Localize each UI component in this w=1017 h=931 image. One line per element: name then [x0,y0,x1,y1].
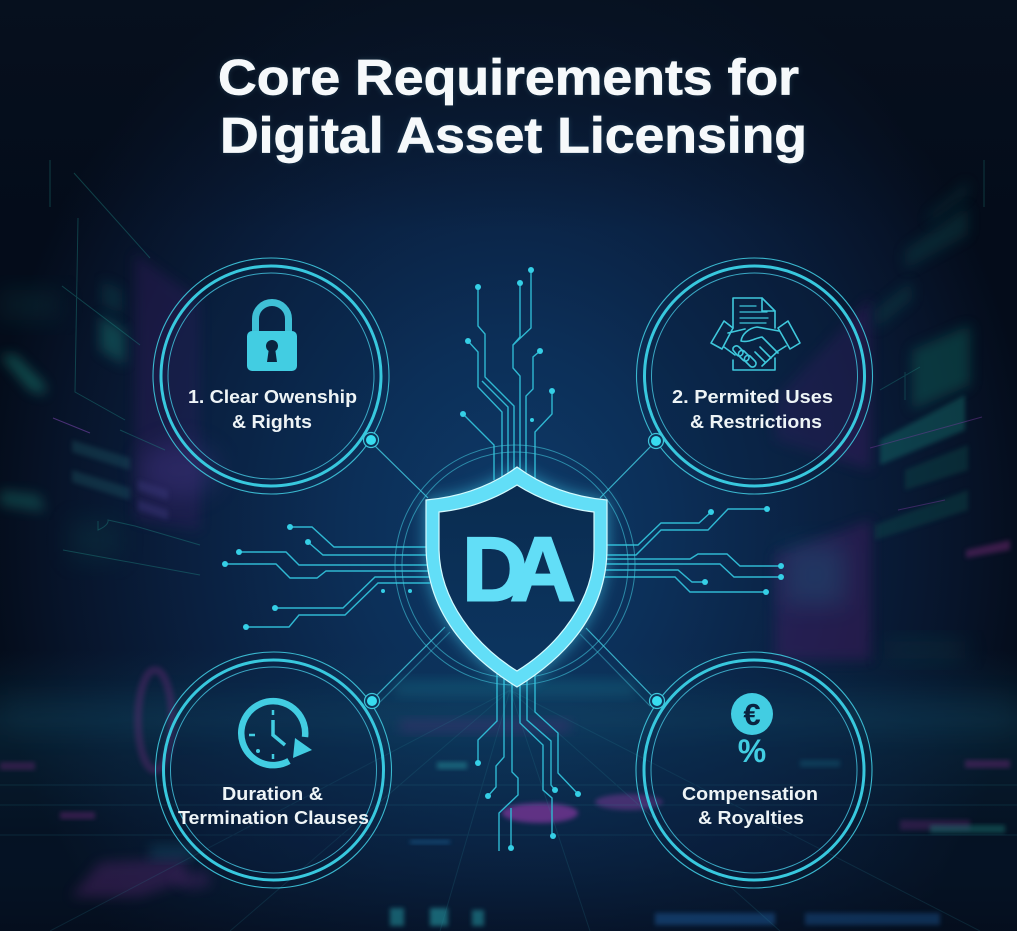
shield monogram: A [510,520,576,620]
label: clear ownership [188,386,357,432]
icon: euro coin and percent: % [738,733,766,769]
circuit traces: right [604,506,784,595]
panel: permitted uses [636,258,872,494]
title: Core Requirements for [218,50,799,106]
label: clear ownership: & Rights [232,411,312,432]
title: Digital Asset Licensing [220,108,807,164]
panel: compensation and royalties [636,652,872,888]
shield emblem [426,467,607,687]
connector nodes [364,432,664,708]
diagonal connectors [372,441,656,706]
label: clear ownership: 1. Clear Owenship [188,386,357,407]
background: digital floor [0,670,1017,931]
panel: clear ownership [153,258,389,494]
circuit traces: bottom [475,670,581,851]
label: duration and termination: Duration & [222,783,323,804]
label: permitted uses: & Restrictions [690,411,822,432]
label: permitted uses [672,386,833,432]
label: duration and termination [178,783,369,828]
title: Digital Asset Licensing [220,108,807,164]
icon: padlock [247,302,297,371]
background: right data wall [775,160,1010,660]
icon: clock with return arrow [241,701,312,765]
label: permitted uses: 2. Permited Uses [672,386,833,407]
title [218,50,807,164]
label: compensation and royalties: Compensation [682,783,818,804]
icon: euro coin and percent: € [743,697,761,732]
background: left data wall [0,160,220,575]
shield monogram: D [462,520,528,620]
label: compensation and royalties: & Royalties [698,807,804,828]
label: compensation and royalties [682,783,818,828]
icon: contract and handshake [711,298,800,370]
icon: euro coin and percent [731,693,773,769]
panel: duration and termination [156,652,392,888]
circuit traces: left [222,524,430,630]
shield halo rings [395,445,635,685]
title: Core Requirements for [218,50,799,106]
circuit traces: top [460,267,555,480]
label: duration and termination: Termination Clauses [178,807,369,828]
